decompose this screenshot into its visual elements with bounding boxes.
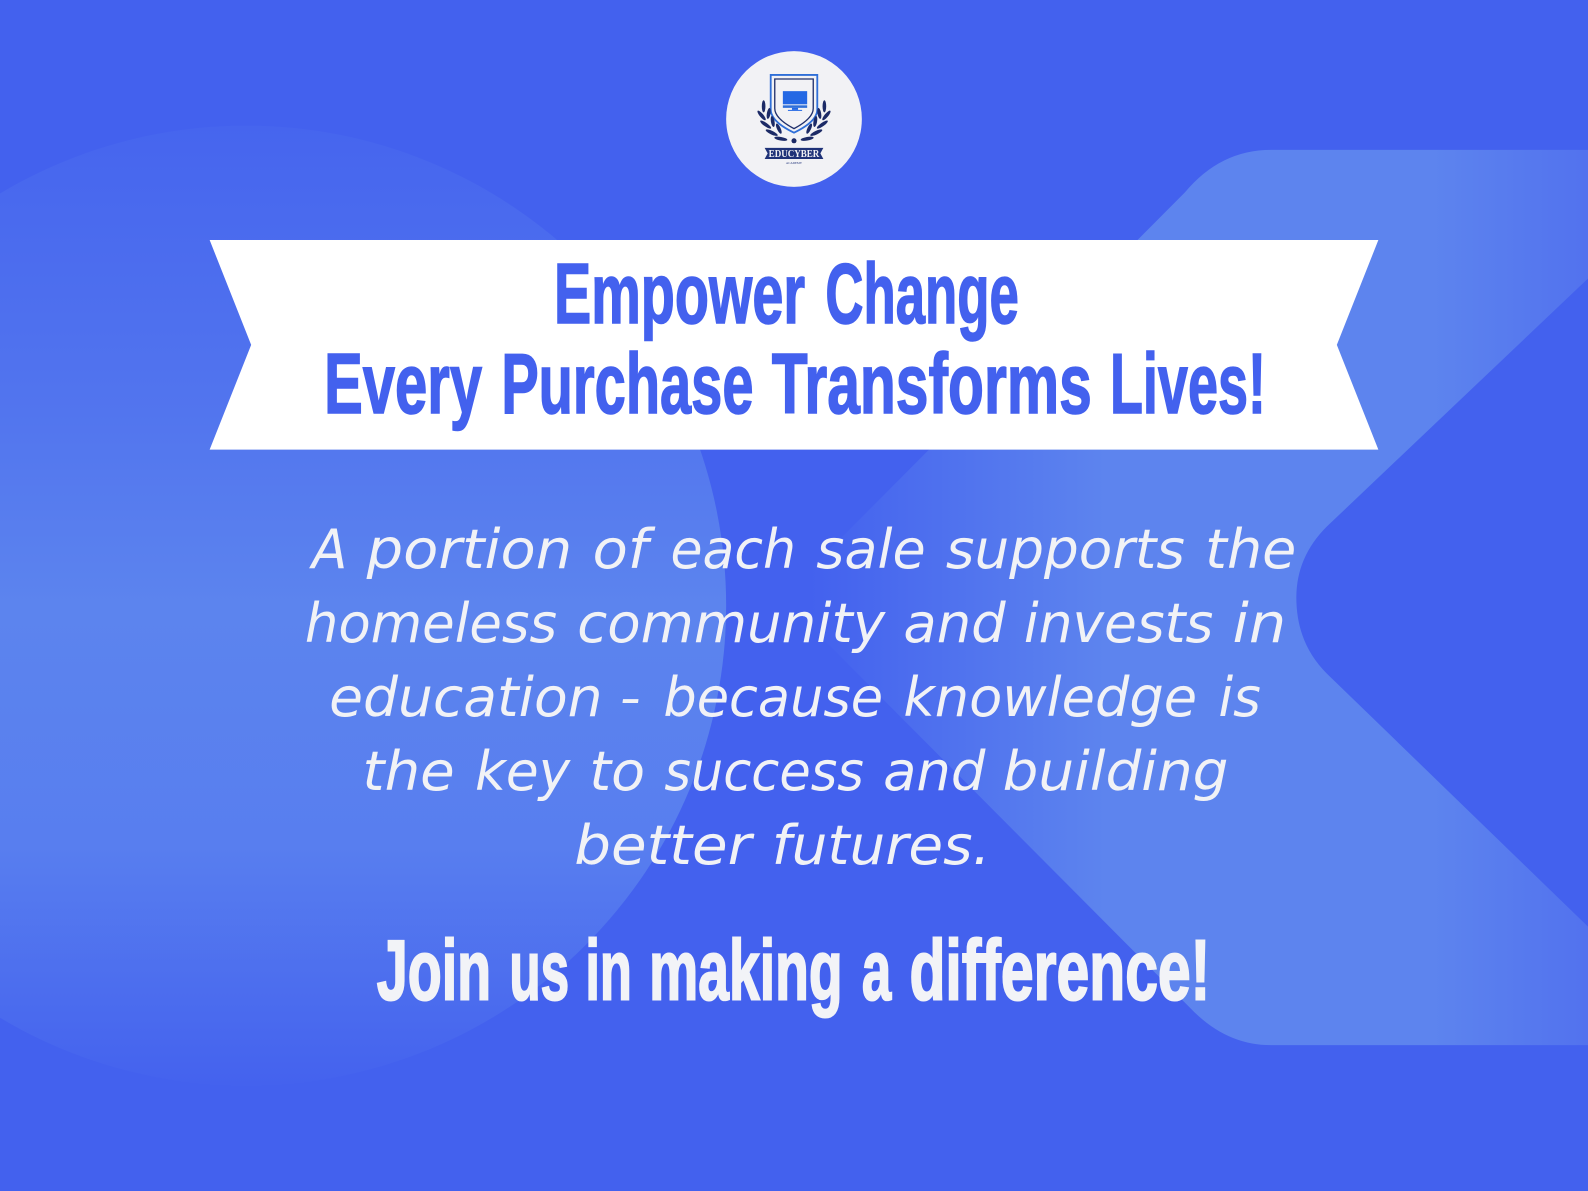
body line 4: the (363, 739, 455, 803)
title line 2: Transforms (772, 337, 1092, 432)
body line 2: community (577, 591, 886, 655)
icon: monitor (783, 91, 807, 111)
body line 1: the (1205, 517, 1296, 581)
logo badge (726, 51, 862, 187)
body line 2: invests (1024, 591, 1213, 655)
title ribbon (210, 240, 1378, 450)
body line 4 (363, 739, 1228, 803)
body line 4: and (883, 739, 986, 803)
logo subtext: ACADEMY (786, 161, 803, 165)
title line 2 (324, 337, 1266, 432)
body line 1: portion (366, 517, 572, 581)
call to action (377, 924, 1210, 1019)
body line 5: futures. (772, 813, 990, 877)
body line 5 (574, 813, 990, 877)
title line 2: Every (324, 337, 482, 432)
background shape: right rounded chevron (782, 150, 1588, 1045)
body line 3: education (329, 665, 603, 729)
body line 1: each (670, 517, 796, 581)
body line 4: building (1003, 739, 1228, 803)
body line 3 (329, 665, 1261, 729)
body line 2: and (903, 591, 1006, 655)
body line 5: better (574, 813, 755, 877)
logo circle (726, 51, 862, 187)
background shape: left circle (0, 126, 726, 1086)
call to action: making (649, 924, 843, 1019)
title (324, 247, 1266, 432)
logo name: EDUCYBER (769, 149, 820, 160)
body line 4: key (475, 739, 571, 803)
title line 1: Change (825, 247, 1019, 342)
call to action: in (585, 924, 632, 1019)
icon: shield (771, 75, 817, 133)
body line 3: knowledge (903, 665, 1197, 729)
call to action: us (509, 924, 569, 1019)
call to action: Join (377, 924, 491, 1019)
body line 3: – (621, 665, 640, 729)
body line 4: success (664, 739, 864, 803)
body line 1: sale (816, 517, 926, 581)
call to action: difference! (909, 924, 1210, 1019)
body line 1 (309, 517, 1296, 581)
body line 2: in (1233, 591, 1286, 655)
logo ribbon (765, 148, 823, 159)
body line 3: is (1218, 665, 1261, 729)
call to action: a (862, 924, 892, 1019)
body line 2: homeless (305, 591, 557, 655)
body paragraph (305, 517, 1296, 877)
body line 4: to (589, 739, 645, 803)
icon: laurel wreath (756, 100, 832, 143)
body line 1: A (309, 517, 347, 581)
title line 1: Empower (554, 247, 805, 342)
body line 1: of (592, 517, 656, 581)
body line 3: because (663, 665, 883, 729)
title line 2: Lives! (1110, 337, 1266, 432)
body line 2 (305, 591, 1286, 655)
body line 1: supports (946, 517, 1185, 581)
title line 2: Purchase (501, 337, 753, 432)
